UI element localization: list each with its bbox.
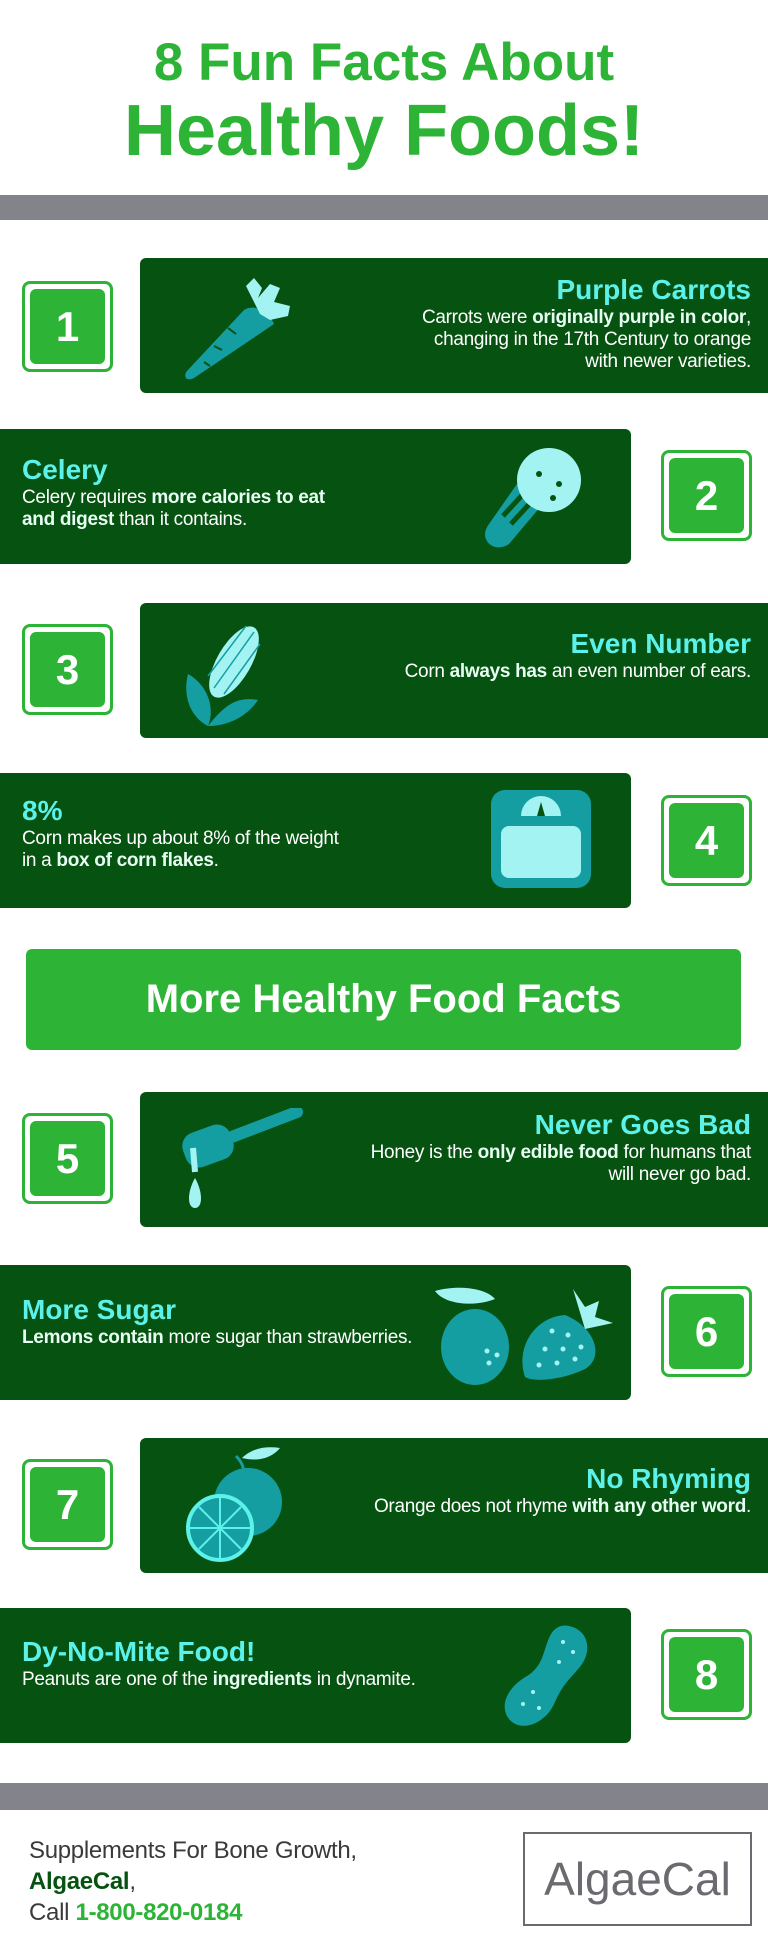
number 6: 6 xyxy=(695,1308,718,1355)
number 4 xyxy=(661,795,752,886)
number 1 xyxy=(22,281,113,372)
text: 8% xyxy=(22,795,339,871)
number 2: 2 xyxy=(695,472,718,519)
text: celery: Celery requires more calories to eat xyxy=(22,487,325,508)
panel 4: 8% xyxy=(0,773,631,908)
text: no rhyming: No Rhyming xyxy=(586,1463,751,1494)
panel 2: celery xyxy=(0,429,631,564)
text: never goes bad: will never go bad. xyxy=(609,1164,751,1185)
text: purple carrots: Carrots were originally purple in color, xyxy=(422,307,751,328)
text: even number: Even Number xyxy=(570,628,751,659)
text: dy-no-mite: Peanuts are one of the ingredients in dynamite. xyxy=(22,1669,416,1690)
number 5: 5 xyxy=(56,1135,79,1182)
panel 1: purple carrots xyxy=(140,258,768,393)
text: dy-no-mite xyxy=(22,1636,416,1690)
icon: scale xyxy=(491,790,591,888)
number 3 xyxy=(22,624,113,715)
icon: lemon and strawberry xyxy=(435,1288,613,1385)
panel 7: no rhyming xyxy=(140,1438,768,1573)
text: celery: and digest than it contains. xyxy=(22,509,247,530)
text: no rhyming: Orange does not rhyme with any other word. xyxy=(374,1496,751,1517)
text: celery xyxy=(22,454,325,530)
icon: celery xyxy=(485,448,581,548)
text: never goes bad xyxy=(371,1109,752,1185)
panel 5: never goes bad xyxy=(140,1092,768,1227)
number 1: 1 xyxy=(56,303,79,350)
title xyxy=(124,33,644,171)
title: 8 Fun Facts About xyxy=(154,33,614,92)
icon: orange xyxy=(186,1447,282,1562)
icon: carrot xyxy=(185,278,290,380)
number 3: 3 xyxy=(56,646,79,693)
logo: algaecal xyxy=(523,1832,752,1926)
text: purple carrots: with newer varieties. xyxy=(585,351,751,372)
title: Healthy Foods! xyxy=(124,91,644,171)
panel 6: more sugar xyxy=(0,1265,631,1400)
text: never goes bad: Never Goes Bad xyxy=(535,1109,751,1140)
number 2 xyxy=(661,450,752,541)
banner: more healthy food facts: More Healthy Food Facts xyxy=(146,977,621,1021)
number 8: 8 xyxy=(695,1651,718,1698)
text: purple carrots xyxy=(422,274,751,372)
number 4: 4 xyxy=(695,817,718,864)
logo: algaecal: AlgaeCal xyxy=(544,1853,731,1905)
icon: honey dipper xyxy=(182,1108,303,1208)
icon: peanut xyxy=(504,1626,588,1726)
number 6 xyxy=(661,1286,752,1377)
text: no rhyming xyxy=(374,1463,751,1517)
number 8 xyxy=(661,1629,752,1720)
panel 3: even number xyxy=(140,603,768,738)
number 7 xyxy=(22,1459,113,1550)
text: celery: Celery xyxy=(22,454,108,485)
text: 8%: Corn makes up about 8% of the weight xyxy=(22,828,339,849)
text: 8%: in a box of corn flakes. xyxy=(22,850,219,871)
text: more sugar: Lemons contain more sugar than strawberries. xyxy=(22,1327,412,1348)
text: 8%: 8% xyxy=(22,795,62,826)
footer text: Supplements For Bone Growth, xyxy=(29,1837,357,1864)
text: even number xyxy=(405,628,751,682)
text: never goes bad: Honey is the only edible food for humans that xyxy=(371,1142,751,1163)
text: dy-no-mite: Dy-No-Mite Food! xyxy=(22,1636,255,1667)
text: more sugar xyxy=(22,1294,412,1348)
text: more sugar: More Sugar xyxy=(22,1294,176,1325)
banner: more healthy food facts xyxy=(26,949,741,1050)
number 7: 7 xyxy=(56,1481,79,1528)
footer text: AlgaeCal, xyxy=(29,1868,136,1895)
text: even number: Corn always has an even number of ears. xyxy=(405,661,751,682)
footer text: Call 1-800-820-0184 xyxy=(29,1899,242,1926)
text: purple carrots: changing in the 17th Century to orange xyxy=(434,329,751,350)
panel 8: dy-no-mite food xyxy=(0,1608,631,1743)
icon: corn xyxy=(186,626,260,726)
text: purple carrots: Purple Carrots xyxy=(556,274,751,305)
number 5 xyxy=(22,1113,113,1204)
footer text xyxy=(29,1837,357,1926)
